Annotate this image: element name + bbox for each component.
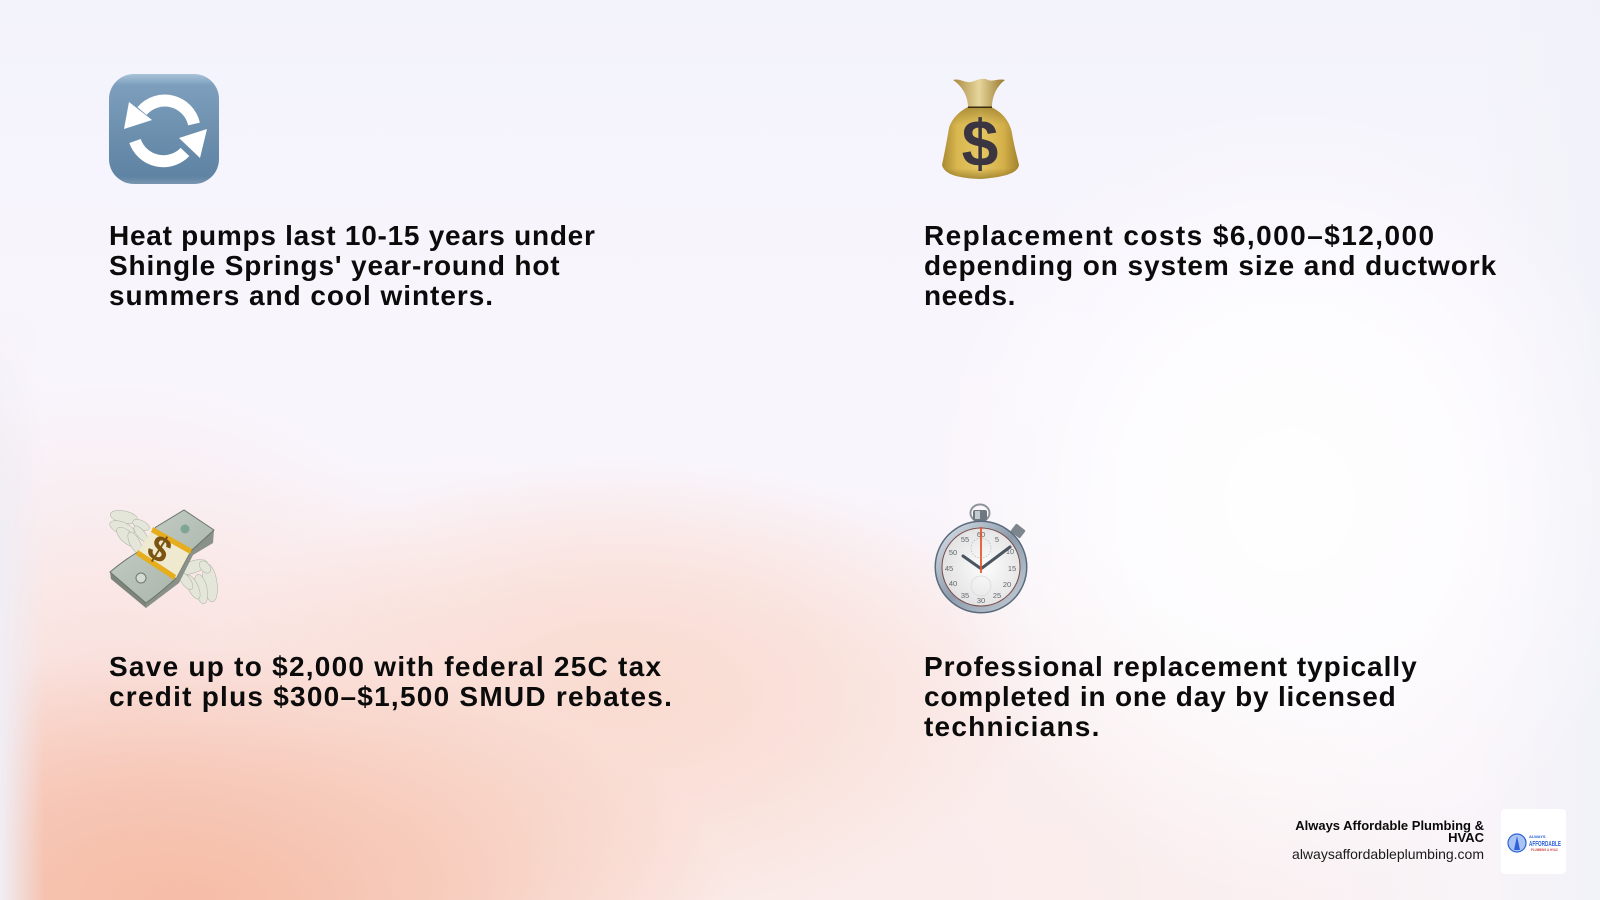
text: cost [924, 220, 1497, 311]
icon: stopwatch [934, 504, 1028, 614]
text: lifespan: Shingle Springs' year-round hot [109, 250, 560, 281]
icon: stopwatch: 15 [1008, 564, 1016, 573]
company name and website: Always Affordable Plumbing & [1295, 818, 1484, 833]
text: lifespan [109, 220, 596, 311]
footer branding [1292, 809, 1566, 874]
text: cost: Replacement costs $6,000–$12,000 [924, 220, 1436, 251]
dollar sign: $ [962, 106, 998, 180]
lower wing [177, 557, 220, 605]
panel: lifespan [109, 74, 596, 311]
company name and website: alwaysaffordableplumbing.com [1292, 846, 1484, 862]
company name and website [1292, 818, 1484, 862]
icon: stopwatch: 20 [1003, 580, 1011, 589]
icon: money with wings [109, 510, 218, 608]
dollar sign: $ [140, 526, 179, 571]
icon: stopwatch: 25 [993, 591, 1001, 600]
icon: stopwatch: 40 [949, 579, 957, 588]
text: install time [924, 651, 1418, 742]
logo [1501, 809, 1566, 874]
text: savings: credit plus $300–$1,500 SMUD rebates. [109, 681, 673, 712]
paper band [138, 528, 191, 578]
icon: stopwatch: 45 [945, 564, 953, 573]
icon: stopwatch: 30 [977, 596, 985, 605]
logo: PLUMBING & HVAC [1531, 848, 1558, 852]
icon: money bag [942, 78, 1019, 180]
text: savings [109, 651, 673, 712]
panel: install time [924, 504, 1418, 742]
icon: stopwatch: 10 [1006, 547, 1014, 556]
upper wing [108, 508, 151, 556]
icon: stopwatch: 55 [961, 535, 969, 544]
text: cost: needs. [924, 280, 1016, 311]
text: install time: technicians. [924, 711, 1101, 742]
text: install time: completed in one day by licensed [924, 681, 1396, 712]
text: cost: depending on system size and ductwork [924, 250, 1497, 281]
logo: ALWAYS [1529, 834, 1546, 839]
panel: cost [924, 78, 1497, 311]
icon: stopwatch: 60 [977, 530, 985, 539]
icon: stopwatch: 50 [949, 548, 957, 557]
panel: savings [109, 510, 673, 712]
stack of bills [110, 572, 146, 608]
text: lifespan: summers and cool winters. [109, 280, 494, 311]
text: lifespan: Heat pumps last 10-15 years under [109, 220, 596, 251]
text: savings: Save up to $2,000 with federal 25C tax [109, 651, 662, 682]
company name and website: HVAC [1448, 830, 1484, 845]
icon: counterclockwise arrows [109, 74, 219, 184]
icon: stopwatch: 35 [961, 591, 969, 600]
text: install time: Professional replacement typically [924, 651, 1418, 682]
icon: stopwatch: 5 [995, 535, 999, 544]
